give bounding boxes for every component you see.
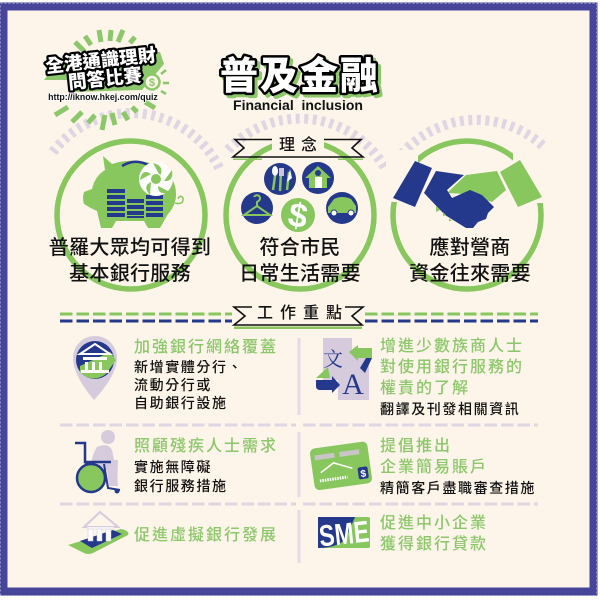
text: circle 3 bbox=[409, 235, 531, 285]
item: corporate account: 精簡客戶盡職審查措施 bbox=[380, 480, 536, 496]
item: bank network: 加強銀行網絡覆蓋 bbox=[134, 338, 278, 356]
dashed divider lines bbox=[60, 314, 538, 504]
icon: handshake bbox=[393, 160, 542, 228]
icon: translation: 文 bbox=[323, 348, 343, 371]
icon: car bbox=[326, 192, 358, 224]
text: circle 2: 符合市民 bbox=[259, 236, 341, 259]
item: corporate account: 提倡推出 bbox=[380, 437, 452, 455]
item: SME: 促進中小企業 bbox=[380, 513, 488, 532]
icon: bank card: $ bbox=[360, 468, 367, 480]
text: circle 1: 普羅大眾均可得到 bbox=[49, 236, 211, 259]
gaps in ring bbox=[386, 150, 418, 202]
icon: phone with bank bbox=[68, 512, 128, 554]
item: virtual bank: 促進虛擬銀行發展 bbox=[134, 526, 278, 544]
icon: house bbox=[302, 162, 334, 194]
item: bank network: 新增實體分行、 bbox=[134, 359, 243, 375]
logo: quiz badge: 全港通識理財 bbox=[45, 44, 158, 77]
icon: piggy bank bbox=[83, 156, 183, 228]
dashed arcs above circles bbox=[53, 113, 545, 172]
logo: quiz badge: 問答比賽 bbox=[67, 64, 143, 93]
item: minorities: 增進少數族商人士 bbox=[380, 337, 524, 355]
ribbon: 理念: 理念 bbox=[279, 135, 323, 154]
item: minorities: 權責的了解 bbox=[380, 379, 470, 397]
title: 普及金融 bbox=[223, 59, 383, 101]
item: SME bbox=[318, 513, 488, 554]
item: disabled: 實施無障礙 bbox=[134, 459, 212, 475]
item: corporate account: 企業簡易賬戶 bbox=[380, 457, 488, 476]
text: circle 3: 應對營商 bbox=[429, 235, 511, 259]
icon: wheelchair bbox=[75, 430, 120, 494]
item: bank network bbox=[73, 336, 278, 411]
icon: translation: A bbox=[342, 368, 364, 401]
item: disabled: 銀行服務措施 bbox=[134, 478, 228, 494]
text: circle 1 bbox=[49, 236, 211, 285]
ribbon: 工作重點: 工作重點 bbox=[257, 304, 349, 322]
circle 3: handshake bbox=[386, 141, 549, 289]
subtitle: Financial inclusion bbox=[233, 97, 363, 113]
text: circle 2 bbox=[239, 236, 361, 285]
rosette bbox=[139, 162, 173, 196]
icon: bank card bbox=[309, 441, 373, 491]
item: disabled: 照顧殘疾人士需求 bbox=[134, 437, 278, 455]
logo: quiz badge: http://iknow.hkej.com/quiz bbox=[48, 92, 158, 102]
ribbon: 工作重點 bbox=[234, 304, 363, 329]
item: minorities: 對使用銀行服務的 bbox=[380, 358, 524, 376]
title: 普及金融 bbox=[220, 56, 380, 98]
logo: quiz badge bbox=[44, 30, 169, 130]
coin stacks bbox=[107, 189, 163, 218]
icon: SME badge: SME bbox=[318, 515, 371, 554]
icon: dollar coin: $ bbox=[285, 196, 311, 236]
item: virtual bank bbox=[68, 512, 278, 554]
item: minorities bbox=[316, 337, 524, 417]
item: SME: 獲得銀行貸款 bbox=[380, 535, 488, 553]
circle 2: daily needs bbox=[226, 141, 374, 289]
text: circle 3: 資金往來需要 bbox=[409, 262, 531, 285]
logo: light bulb: $ bbox=[149, 77, 155, 89]
icon: translation bbox=[316, 338, 372, 401]
text: circle 2: 日常生活需要 bbox=[239, 262, 361, 285]
item: bank network: 自助銀行設施 bbox=[134, 395, 228, 411]
item: minorities: 翻譯及刊發相關資訊 bbox=[380, 401, 520, 417]
icon: hanger bbox=[241, 192, 273, 224]
item: bank network: 流動分行或 bbox=[134, 377, 212, 393]
item: corporate account bbox=[309, 437, 536, 496]
item: disabled bbox=[75, 430, 278, 494]
text: circle 1: 基本銀行服務 bbox=[69, 262, 191, 285]
ribbon: 理念 bbox=[233, 135, 363, 160]
icon: cutlery bbox=[264, 163, 296, 195]
icon: map pin with bank bbox=[73, 336, 117, 400]
circle 1: piggy bank bbox=[49, 141, 211, 289]
